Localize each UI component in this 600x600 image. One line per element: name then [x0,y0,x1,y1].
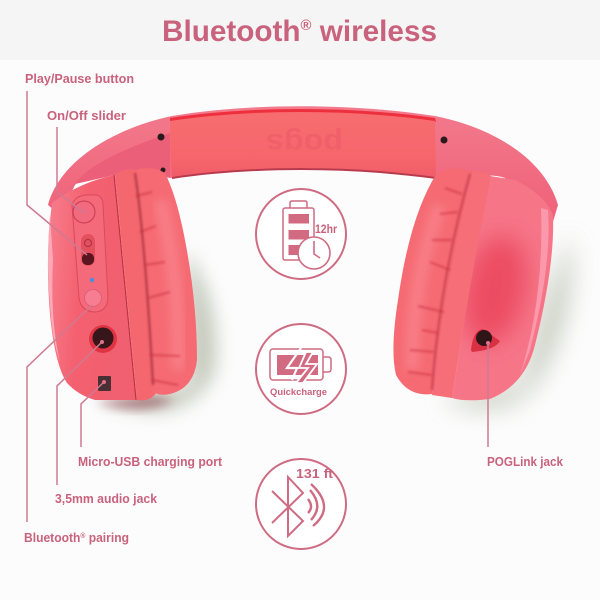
left ear cup body [48,175,137,400]
label: audio jack: 3,5mm audio jack [55,492,157,506]
icon: battery 12hr: 12hr [315,222,337,236]
label: play pause: Play/Pause button [25,72,134,86]
on off slider [81,234,95,266]
leader end dots [82,210,490,384]
headband [48,106,558,225]
control panel [72,195,108,312]
led [90,278,94,282]
leader line: on off slider [57,127,83,212]
label: bluetooth pairing: ® [80,532,86,540]
leader line: bluetooth pairing [27,305,92,522]
icon: bluetooth range [256,459,346,549]
label: poglink: POGLink jack [487,455,563,469]
right ear cup body [452,176,553,400]
left cushion [115,168,197,400]
play pause button [73,201,95,223]
micro usb port [98,376,111,391]
headphones photo [48,106,571,412]
top background band [0,0,600,60]
leader line: poglink [487,343,489,447]
right cushion [393,168,491,398]
poglink jack [471,329,500,352]
label: micro usb: Micro-USB charging port [78,455,223,469]
leader line: play pause button [27,91,87,255]
audio jack [89,325,117,353]
leader line: audio jack [57,342,102,485]
icon: quickcharge [256,324,346,414]
title: Bluetooth [162,15,302,48]
leader line: usb port [81,382,104,447]
headband: pogs [266,127,343,160]
headband pad [170,112,436,177]
title: ® [301,17,312,34]
label: bluetooth pairing: Bluetooth [24,531,82,545]
drop shadows [95,235,571,412]
title: wireless [312,15,437,48]
label: on off slider: On/Off slider [47,109,126,123]
icon: quickcharge: Quickcharge [270,387,327,398]
pairing button [84,290,102,306]
label: bluetooth pairing: pairing [85,531,129,545]
icon: battery 12hr [256,189,346,279]
icon: bluetooth range: 131 ft [296,467,334,481]
